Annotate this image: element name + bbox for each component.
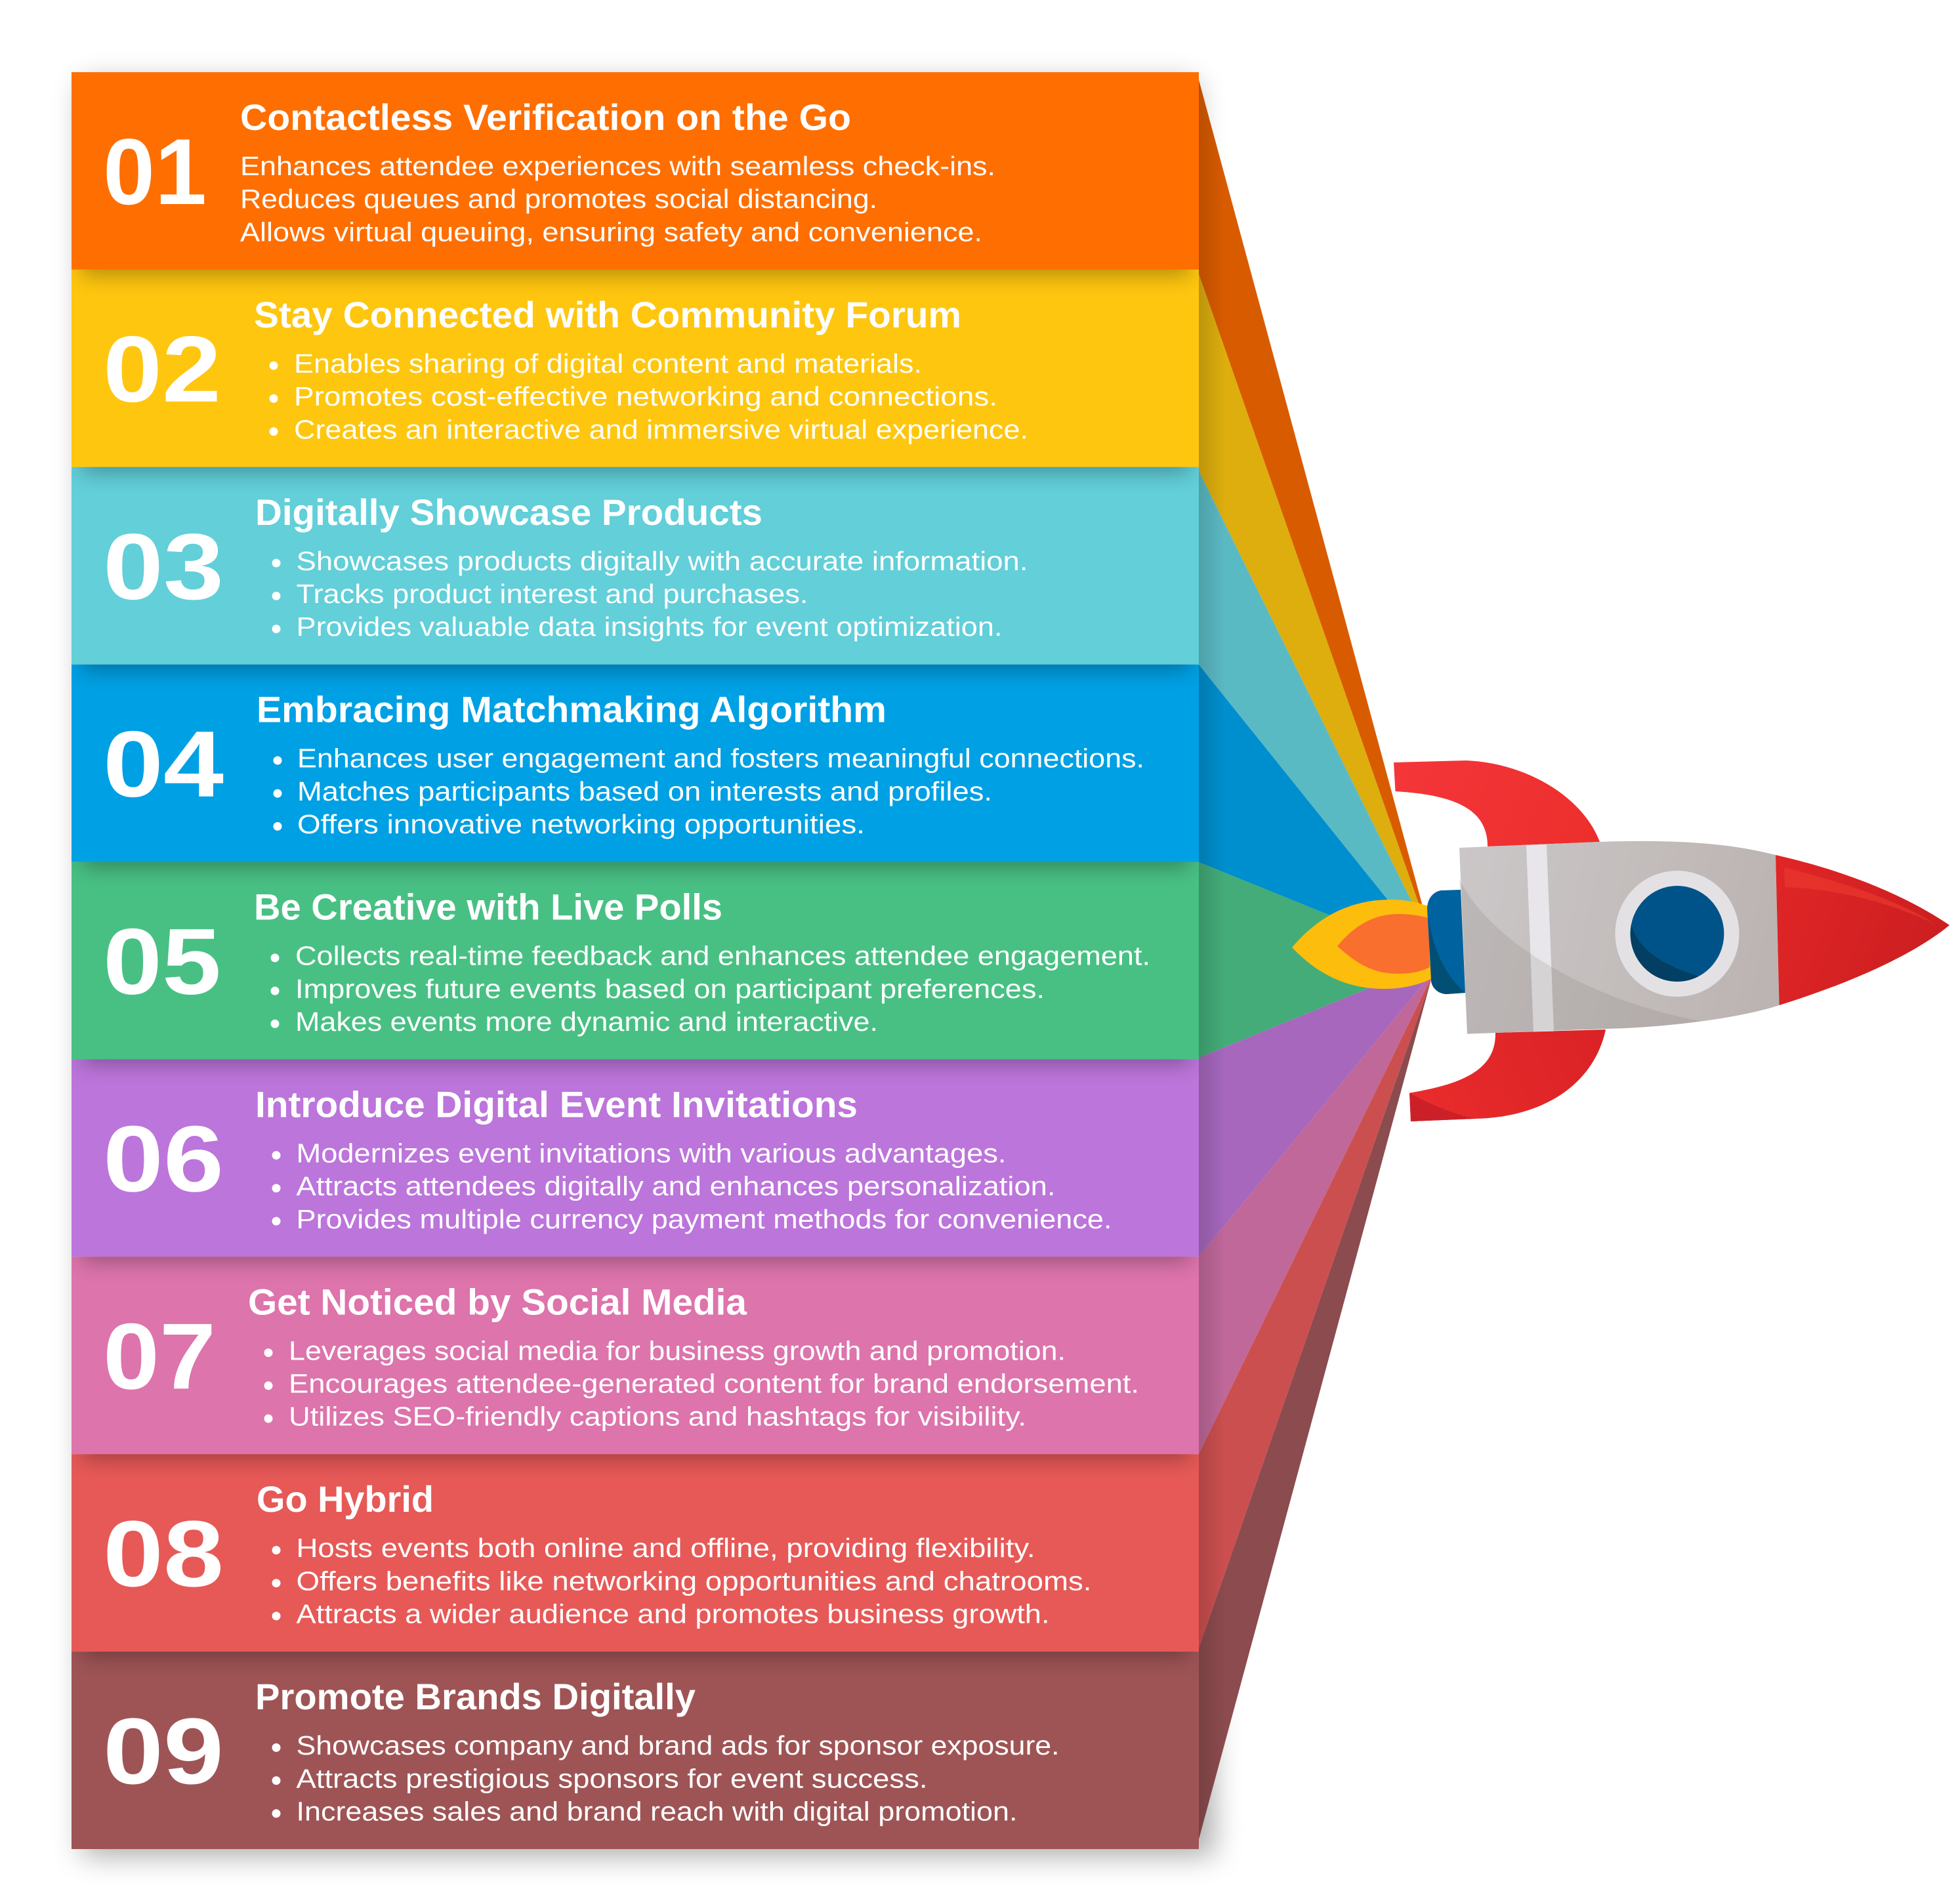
heading 05: Be Creative with Live Polls bbox=[254, 886, 722, 928]
number 02: 02 bbox=[103, 318, 221, 422]
bullet list 02 bbox=[269, 348, 1028, 444]
panel 03: digital product showcase bbox=[72, 467, 1199, 665]
bullet list 09: Showcases company and brand ads for sponsor exposure. bbox=[297, 1730, 1059, 1760]
bullet list 04: Matches participants based on interests and profiles. bbox=[297, 776, 992, 806]
bullet list 03: Tracks product interest and purchases. bbox=[297, 579, 808, 609]
bullet list 04 bbox=[273, 743, 1144, 839]
panel 04: matchmaking algorithm bbox=[72, 664, 1199, 862]
number 03: 03 bbox=[103, 515, 224, 619]
heading 08: Go Hybrid bbox=[257, 1478, 434, 1520]
body text 01 bbox=[240, 151, 995, 247]
bullet list 07 bbox=[264, 1335, 1139, 1432]
bullet list 06: Modernizes event invitations with various advantages. bbox=[297, 1138, 1007, 1168]
rocket nose bbox=[1776, 855, 1950, 1005]
heading 04: Embracing Matchmaking Algorithm bbox=[257, 689, 886, 730]
bullet list 02: Enables sharing of digital content and materials. bbox=[294, 348, 922, 379]
bullet list 03: Provides valuable data insights for event optimization. bbox=[297, 612, 1003, 642]
heading 06: Introduce Digital Event Invitations bbox=[255, 1083, 858, 1125]
panel 08: go hybrid bbox=[72, 1454, 1199, 1652]
number 05: 05 bbox=[103, 910, 221, 1014]
bullet list 05 bbox=[270, 941, 1150, 1037]
heading 07: Get Noticed by Social Media bbox=[248, 1281, 747, 1322]
number 06: 06 bbox=[103, 1107, 224, 1211]
bullet list 06 bbox=[272, 1138, 1112, 1234]
panel 02: community forum bbox=[72, 269, 1199, 467]
bullet list 07: Encourages attendee-generated content for brand endorsement. bbox=[289, 1369, 1139, 1399]
rocket body bbox=[1459, 841, 1780, 1034]
bullet list 05: Collects real-time feedback and enhances attendee engagement. bbox=[295, 941, 1150, 971]
heading 01: Contactless Verification on the Go bbox=[240, 96, 851, 138]
panel 01: contactless verification bbox=[72, 72, 1199, 270]
body text 01: Reduces queues and promotes social distancing. bbox=[240, 184, 877, 214]
light beam fan from rocket to the panels bbox=[1199, 80, 1433, 1839]
number 08: 08 bbox=[103, 1502, 224, 1606]
bullet list 03: Showcases products digitally with accurate information. bbox=[297, 546, 1028, 576]
bullet list 05: Improves future events based on participant preferences. bbox=[295, 974, 1045, 1004]
bullet list 08: Hosts events both online and offline, providing flexibility. bbox=[297, 1533, 1035, 1563]
bullet list 07: Utilizes SEO-friendly captions and hashtags for visibility. bbox=[289, 1402, 1026, 1432]
body text 01: Enhances attendee experiences with seamless check-ins. bbox=[240, 151, 995, 181]
panel 05: live polls bbox=[72, 862, 1199, 1059]
bullet list 09: Increases sales and brand reach with digital promotion. bbox=[297, 1797, 1017, 1827]
icon: rocket bbox=[1292, 760, 1950, 1121]
bullet list 04: Enhances user engagement and fosters meaningful connections. bbox=[297, 743, 1144, 774]
number 01: 01 bbox=[103, 120, 207, 224]
heading 02: Stay Connected with Community Forum bbox=[254, 294, 961, 335]
number 09: 09 bbox=[103, 1699, 224, 1804]
rocket flame bbox=[1292, 900, 1431, 989]
bullet list 09: Attracts prestigious sponsors for event success. bbox=[297, 1763, 928, 1793]
rocket window bbox=[1616, 871, 1739, 997]
bullet list 04: Offers innovative networking opportunities. bbox=[297, 809, 865, 839]
bullet list 06: Attracts attendees digitally and enhances personalization. bbox=[297, 1171, 1055, 1201]
panel 06: digital invitations bbox=[72, 1059, 1199, 1257]
bullet list 02: Promotes cost-effective networking and connections. bbox=[294, 381, 997, 411]
bullet list 08: Offers benefits like networking opportunities and chatrooms. bbox=[297, 1566, 1092, 1596]
number 04: 04 bbox=[103, 713, 224, 817]
rocket upper fin bbox=[1394, 760, 1600, 846]
bullet list 09 bbox=[272, 1730, 1059, 1827]
heading 09: Promote Brands Digitally bbox=[255, 1676, 696, 1717]
panel 07: social media bbox=[72, 1257, 1199, 1454]
bullet list 08 bbox=[272, 1533, 1092, 1629]
heading 03: Digitally Showcase Products bbox=[255, 491, 762, 533]
panel 09: promote brands bbox=[72, 1652, 1199, 1849]
bullet list 08: Attracts a wider audience and promotes business growth. bbox=[297, 1599, 1050, 1629]
bullet list 03 bbox=[272, 546, 1028, 642]
number 07: 07 bbox=[103, 1304, 216, 1409]
bullet list 07: Leverages social media for business growth and promotion. bbox=[289, 1335, 1066, 1365]
bullet list 06: Provides multiple currency payment methods for convenience. bbox=[297, 1204, 1112, 1234]
bullet list 05: Makes events more dynamic and interactive. bbox=[295, 1007, 878, 1037]
bullet list 02: Creates an interactive and immersive virtual experience. bbox=[294, 414, 1028, 444]
rocket lower fin bbox=[1409, 1030, 1606, 1121]
body text 01: Allows virtual queuing, ensuring safety and convenience. bbox=[240, 217, 982, 247]
rocket nozzle bbox=[1427, 890, 1465, 994]
